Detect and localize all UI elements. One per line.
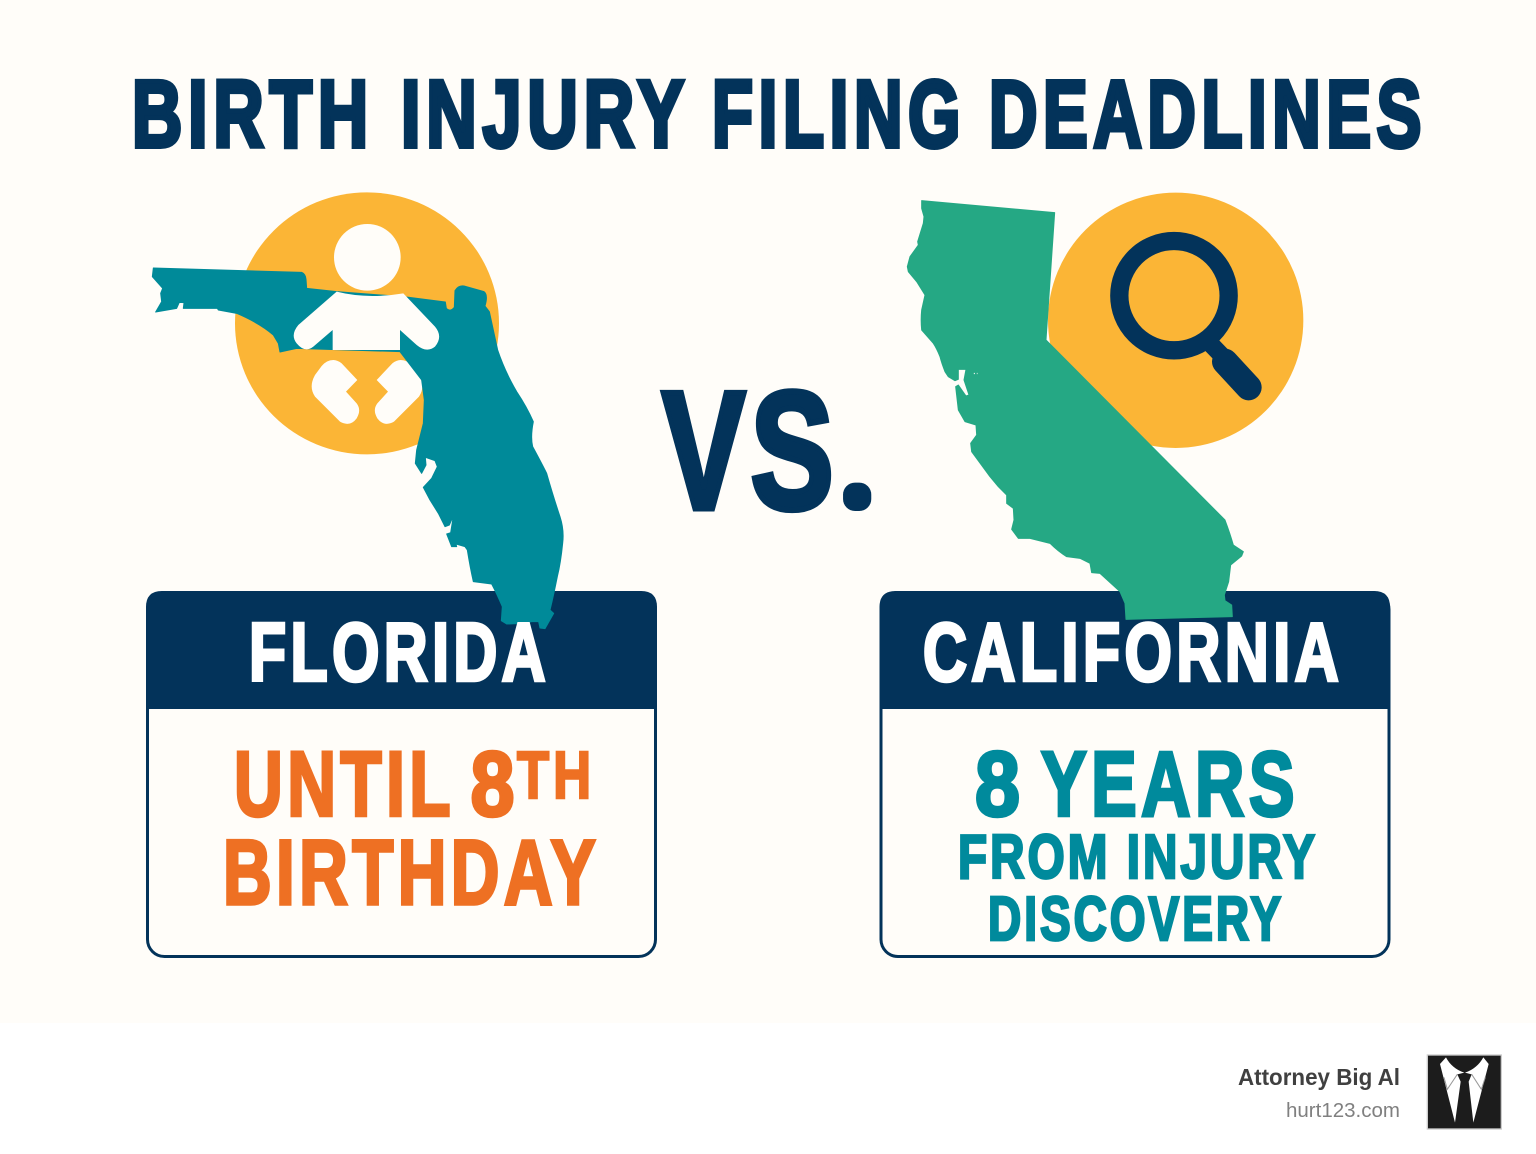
title xyxy=(132,62,1427,168)
Florida deadline: UNTIL xyxy=(234,734,455,836)
icon: baby body xyxy=(294,292,439,350)
Florida illustration xyxy=(152,192,563,629)
title: FILING xyxy=(712,62,966,168)
title: INJURY xyxy=(401,62,690,168)
Florida deadline: 8 xyxy=(470,734,514,836)
Florida deadline: TH xyxy=(517,738,595,813)
California deadline: DISCOVERY xyxy=(988,885,1284,954)
versus label: . xyxy=(853,473,861,506)
footer brand name: Attorney Big Al xyxy=(1238,1064,1400,1090)
California illustration xyxy=(907,193,1303,619)
card: California xyxy=(880,591,1390,956)
Florida deadline xyxy=(223,734,600,924)
icon: baby head xyxy=(334,224,401,291)
map: Florida xyxy=(152,268,563,629)
icon: amber circle behind baby xyxy=(235,192,499,454)
Florida deadline: BIRTHDAY xyxy=(223,822,600,924)
California deadline xyxy=(958,734,1318,954)
icon: baby feet xyxy=(312,360,422,424)
logo: suit and tie xyxy=(1427,1055,1501,1129)
icon: amber circle behind magnifier xyxy=(1048,193,1303,448)
California heading: CALIFORNIA xyxy=(923,606,1343,698)
footer website: hurt123.com xyxy=(1286,1100,1400,1122)
California deadline: YEARS xyxy=(1041,734,1299,836)
icon: magnifying glass xyxy=(1119,241,1249,387)
map: California xyxy=(907,201,1243,619)
California deadline: 8 xyxy=(975,734,1020,836)
California deadline: FROM INJURY xyxy=(958,823,1318,892)
versus label: VS xyxy=(662,356,839,544)
Florida heading: FLORIDA xyxy=(249,606,550,698)
title: BIRTH xyxy=(132,62,374,168)
card: Florida xyxy=(146,591,657,956)
